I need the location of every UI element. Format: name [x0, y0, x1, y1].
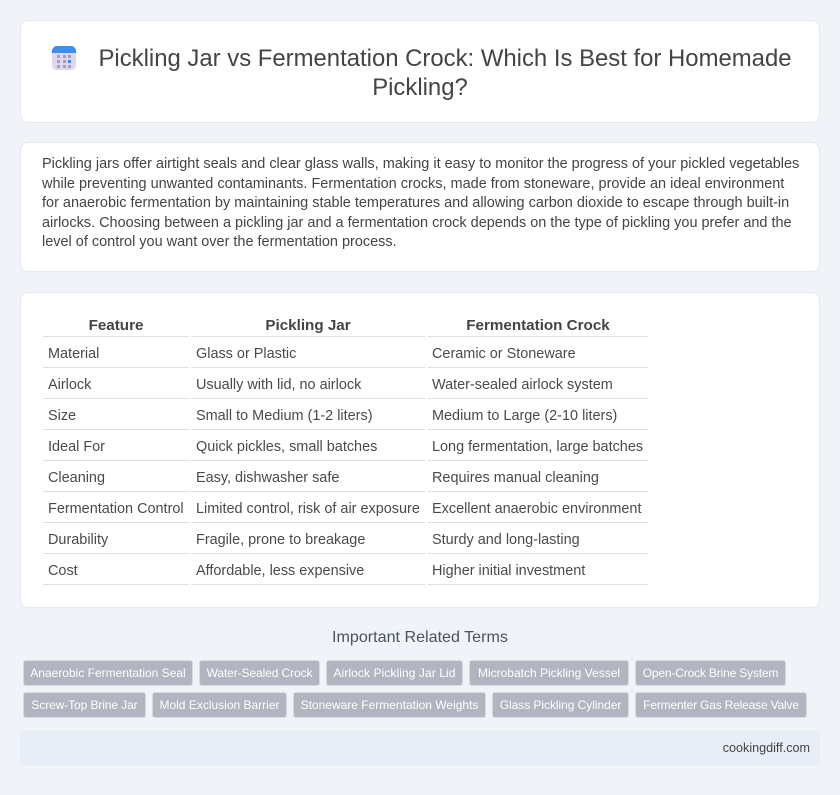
row: Size: Medium to Large (2-10 liters) — [432, 408, 617, 424]
row: Cost: Affordable, less expensive — [196, 563, 364, 579]
related terms tags — [23, 660, 807, 718]
footer source: cookingdiff.com — [723, 741, 810, 755]
row: Cleaning: Easy, dishwasher safe — [196, 470, 339, 486]
panel: comparison table — [20, 292, 820, 608]
row: Airlock — [43, 377, 648, 399]
intro paragraph: level of control you want over the fermentation process. — [42, 234, 397, 250]
row: Fermentation Control: Fermentation Control — [48, 501, 184, 517]
icon: calendar — [52, 46, 76, 70]
row: Size — [43, 408, 648, 430]
row: Fermentation Control — [43, 501, 648, 523]
row: Airlock: Water-sealed airlock system — [432, 377, 613, 393]
row: Fermentation Control: Excellent anaerobic environment — [432, 501, 641, 517]
row: Cost: Higher initial investment — [432, 563, 585, 579]
heading: related terms: Important Related Terms — [332, 628, 508, 646]
row: Material: Material — [48, 346, 99, 362]
intro paragraph — [42, 156, 799, 250]
intro paragraph: Pickling jars offer airtight seals and clear glass walls, making it easy to monitor the progress of your pickled vegetables — [42, 156, 799, 172]
row: Durability: Sturdy and long-lasting — [432, 532, 580, 548]
title: Pickling? — [372, 74, 468, 101]
related terms tags: Airlock Pickling Jar Lid — [334, 666, 455, 680]
header: Pickling Jar: Pickling Jar — [265, 317, 351, 334]
intro paragraph: airlocks. Choosing between a pickling jar and a fermentation crock depends on the type of pickling you prefer and the — [42, 215, 792, 231]
related terms tags: Microbatch Pickling Vessel — [478, 666, 620, 680]
related terms tags: Stoneware Fermentation Weights — [301, 698, 478, 712]
header: Feature — [43, 312, 189, 337]
row: Size: Small to Medium (1-2 liters) — [196, 408, 372, 424]
related terms tags: Mold Exclusion Barrier — [159, 698, 280, 712]
footer bar — [20, 731, 820, 765]
row: Durability — [43, 532, 648, 554]
row: Ideal For: Long fermentation, large batches — [432, 439, 643, 455]
panel: introduction — [20, 142, 820, 272]
row: Material — [43, 346, 648, 368]
intro paragraph: for anaerobic fermentation by maintaining stable temperatures and allowing carbon dioxide to escape through built-in — [42, 195, 789, 211]
title — [98, 45, 792, 101]
intro paragraph: while preventing unwanted contaminants. Fermentation crocks, made from stoneware, provide an ideal environment — [42, 176, 784, 192]
related terms tags: Open-Crock Brine System — [643, 666, 778, 680]
header: Fermentation Crock: Fermentation Crock — [466, 317, 610, 334]
related terms tags: Fermenter Gas Release Valve — [643, 698, 799, 712]
row: Durability: Fragile, prone to breakage — [196, 532, 365, 548]
related terms tags: Water-Sealed Crock — [207, 666, 312, 680]
row: Airlock: Usually with lid, no airlock — [196, 377, 361, 393]
row: Material: Ceramic or Stoneware — [432, 346, 576, 362]
header: Fermentation Crock — [428, 312, 648, 337]
row: Cost: Cost — [48, 563, 78, 579]
related terms tags: Anaerobic Fermentation Seal — [30, 666, 186, 680]
title: Pickling Jar vs Fermentation Crock: Which Is Best for Homemade — [98, 45, 792, 72]
row: Durability: Durability — [48, 532, 108, 548]
row: Airlock: Airlock — [48, 377, 91, 393]
row: Ideal For: Ideal For — [48, 439, 105, 455]
row: Material: Glass or Plastic — [196, 346, 296, 362]
row: Cleaning: Cleaning — [48, 470, 105, 486]
header: Feature: Feature — [89, 317, 143, 334]
row: Size: Size — [48, 408, 76, 424]
row: Ideal For — [43, 439, 648, 461]
row: Fermentation Control: Limited control, risk of air exposure — [196, 501, 420, 517]
panel: title card — [20, 20, 820, 123]
related terms tags: Screw-Top Brine Jar — [31, 698, 138, 712]
header: Pickling Jar — [191, 312, 425, 337]
row: Cost — [43, 563, 648, 585]
related terms tags: Glass Pickling Cylinder — [500, 698, 621, 712]
row: Cleaning — [43, 470, 648, 492]
row: Ideal For: Quick pickles, small batches — [196, 439, 377, 455]
row: Cleaning: Requires manual cleaning — [432, 470, 599, 486]
